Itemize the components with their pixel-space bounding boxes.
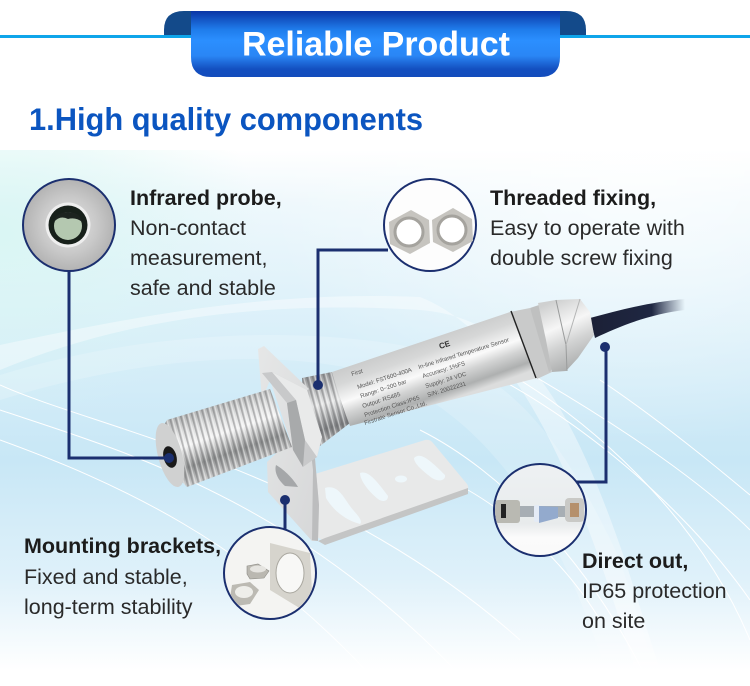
printed labels: Output: RS485: [362, 392, 402, 410]
header rule: [0, 35, 750, 38]
leader: threaded fixing: [318, 250, 388, 385]
product: infrared temperature sensor: [150, 299, 685, 545]
cable: [590, 299, 685, 338]
printed labels: In-line Infrared Temperature Sensor: [418, 338, 510, 371]
callout: direct out: [494, 464, 727, 633]
direct out text: Direct out,: [582, 549, 688, 573]
icon: bracket and nuts: [224, 527, 316, 619]
printed labels: Firstrate Sensor Co.,Ltd.: [364, 401, 428, 427]
icon: hex nuts: [384, 179, 476, 271]
infrared probe text: [130, 186, 282, 300]
printed labels: First: [351, 369, 364, 378]
direct out text: IP65 protection: [582, 579, 727, 603]
threaded fixing text: [490, 186, 685, 270]
sensor body: [332, 312, 537, 426]
mounting brackets text: long-term stability: [24, 595, 193, 619]
threaded fixing text: Easy to operate with: [490, 216, 685, 240]
infrared probe text: measurement,: [130, 246, 267, 270]
bracket base plate: [312, 440, 468, 545]
banner title: Reliable Product: [242, 26, 510, 64]
icon: cable connector: [494, 464, 586, 556]
front face of probe: [150, 420, 190, 490]
infrared probe text: safe and stable: [130, 276, 276, 300]
printed labels: S/N: 20022231: [427, 381, 468, 399]
printed labels: Model: FST600-400A: [357, 368, 413, 391]
printed labels: Protection Class:IP65: [364, 395, 421, 419]
infrared probe text: Non-contact: [130, 216, 246, 240]
infrared probe text: Infrared probe,: [130, 186, 282, 210]
callout: mounting brackets: [24, 527, 316, 619]
callout: infrared probe: [23, 179, 282, 300]
cable gland: [510, 299, 594, 379]
header banner: [0, 11, 750, 77]
threaded fixing text: Threaded fixing,: [490, 186, 656, 210]
banner back tabs: [164, 11, 586, 35]
mounting brackets text: [24, 534, 221, 619]
background wave panel: [0, 150, 750, 686]
leader: direct out: [575, 347, 606, 482]
front threaded barrel: [162, 389, 292, 487]
bracket upright plate: [258, 346, 319, 541]
direct out text: [582, 549, 727, 633]
leader lines: [69, 250, 606, 530]
mounting nut: [262, 372, 322, 467]
printed labels: Accuracy: 1%FS: [422, 361, 466, 380]
mounting brackets text: Fixed and stable,: [24, 565, 188, 589]
threaded fixing text: double screw fixing: [490, 246, 673, 270]
printed labels: CE: [438, 339, 452, 351]
direct out text: on site: [582, 609, 645, 633]
callout: threaded fixing: [384, 179, 685, 271]
printed labels: [351, 338, 510, 427]
leader: mounting bracket: [284, 500, 286, 530]
printed labels: Range: 0~200 bar: [360, 379, 407, 400]
banner front: [191, 11, 560, 77]
printed labels: Supply: 24 VDC: [425, 371, 468, 390]
icon: probe lens: [23, 179, 115, 271]
mounting brackets text: Mounting brackets,: [24, 534, 221, 558]
leader dots: [164, 342, 610, 505]
section heading: 1.High quality components: [29, 101, 423, 137]
leader: infrared probe: [69, 270, 169, 458]
rear thread: [302, 372, 350, 446]
